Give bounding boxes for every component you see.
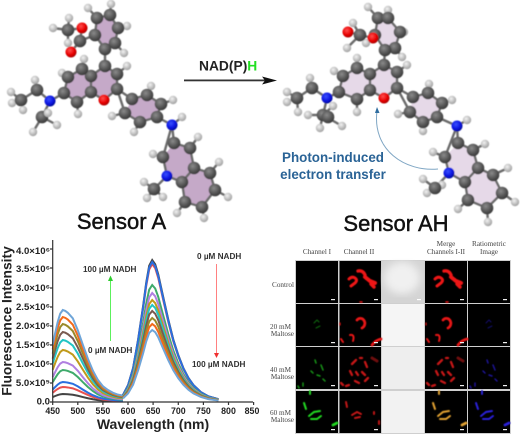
arrow: green up (108, 276, 113, 341)
microscopy row labels: 20 mM (270, 323, 292, 331)
x axis tick labels: 550 (96, 406, 110, 416)
callout: photon-induced electron transfer: Photon-induced (282, 150, 384, 165)
callout: photon-induced electron transfer: electron transfer (280, 167, 387, 182)
y axis tick labels: 1.5×10⁶ (16, 340, 50, 351)
reaction arrow (184, 76, 277, 84)
microscopy row labels: Maltose (271, 416, 294, 424)
merged channels column (425, 261, 467, 433)
chart curves: left emission peak (53, 310, 123, 401)
y axis tick labels: 4.0×10⁶ (16, 246, 50, 257)
channel II column (340, 261, 381, 433)
fluorescent signal: merged orange (433, 391, 466, 425)
y axis tick labels (16, 246, 50, 408)
y axis tick labels: 1.0×10⁶ (16, 359, 50, 370)
microscopy column labels (303, 240, 506, 256)
fluorescent signal: ratiometric blue (470, 320, 509, 425)
molecule: Sensor AH (283, 3, 519, 226)
y axis tick labels: 0.0 (37, 396, 50, 408)
y axis tick labels: 2.0×10⁶ (16, 321, 50, 332)
x axis tick labels (45, 406, 259, 416)
annotation: 0 µM NADH falling: 0 µM NADH (197, 252, 241, 261)
microscopy image grid (295, 260, 511, 434)
microscopy row labels: 60 mM (270, 409, 292, 417)
reaction label: NAD(P)H: NAD(P)H (199, 58, 257, 74)
y axis tick labels: 3.5×10⁶ (16, 264, 50, 275)
x axis tick labels: 750 (196, 406, 211, 416)
x axis tick labels: 700 (171, 406, 186, 416)
curved arrow: electron transfer (375, 107, 438, 169)
molecule: Sensor A (7, 0, 232, 222)
x axis tick labels: 450 (45, 406, 60, 416)
heading: Sensor AH: Sensor AH (343, 211, 449, 236)
chart axes (50, 240, 254, 405)
x axis tick labels: 850 (245, 406, 259, 416)
x axis tick labels: 800 (221, 406, 236, 416)
microscopy column labels: Image (480, 248, 498, 256)
microscopy column labels: Channels I-II (427, 248, 466, 256)
fluorescent signal: merged red (426, 271, 467, 386)
arrow: red down (214, 264, 219, 358)
microscopy row labels: Maltose (271, 330, 294, 338)
annotation: 100 µM NADH rising: 100 µM NADH (83, 265, 136, 274)
annotation: 0 µM NADH rising: 0 µM NADH (88, 346, 132, 355)
annotation: 100 µM NADH falling: 100 µM NADH (192, 360, 245, 369)
heading: Sensor A: Sensor A (77, 209, 166, 234)
microscopy column labels: Channel I (303, 248, 332, 256)
y axis tick labels: 3.0×10⁶ (16, 283, 50, 294)
y axis tick labels: 5.0×10⁵ (16, 378, 50, 389)
microscopy row labels: Maltose (271, 373, 294, 381)
chart: fluorescence spectra (0, 240, 259, 432)
scale bars (331, 299, 507, 430)
chart curves: right emission peak (123, 260, 218, 401)
brightfield column (382, 261, 424, 433)
microscopy row labels (270, 281, 294, 424)
fluorescent signal: green channel (298, 320, 337, 425)
microscopy row labels: 40 mM (270, 366, 292, 374)
fluorescent signal: red channel (340, 271, 381, 424)
ratiometric column (468, 261, 510, 433)
y axis tick labels: 2.5×10⁶ (16, 302, 50, 313)
channel I column (296, 261, 338, 433)
x axis tick labels: 650 (146, 406, 161, 416)
x axis title: Wavelength (nm) (97, 416, 209, 432)
x axis tick labels: 500 (70, 406, 85, 416)
microscopy column labels: Ratiometric (472, 240, 506, 248)
microscopy row labels: Control (272, 281, 294, 289)
x axis tick labels: 600 (121, 406, 135, 416)
microscopy column labels: Channel II (344, 248, 375, 256)
microscopy column labels: Merge (437, 240, 455, 248)
